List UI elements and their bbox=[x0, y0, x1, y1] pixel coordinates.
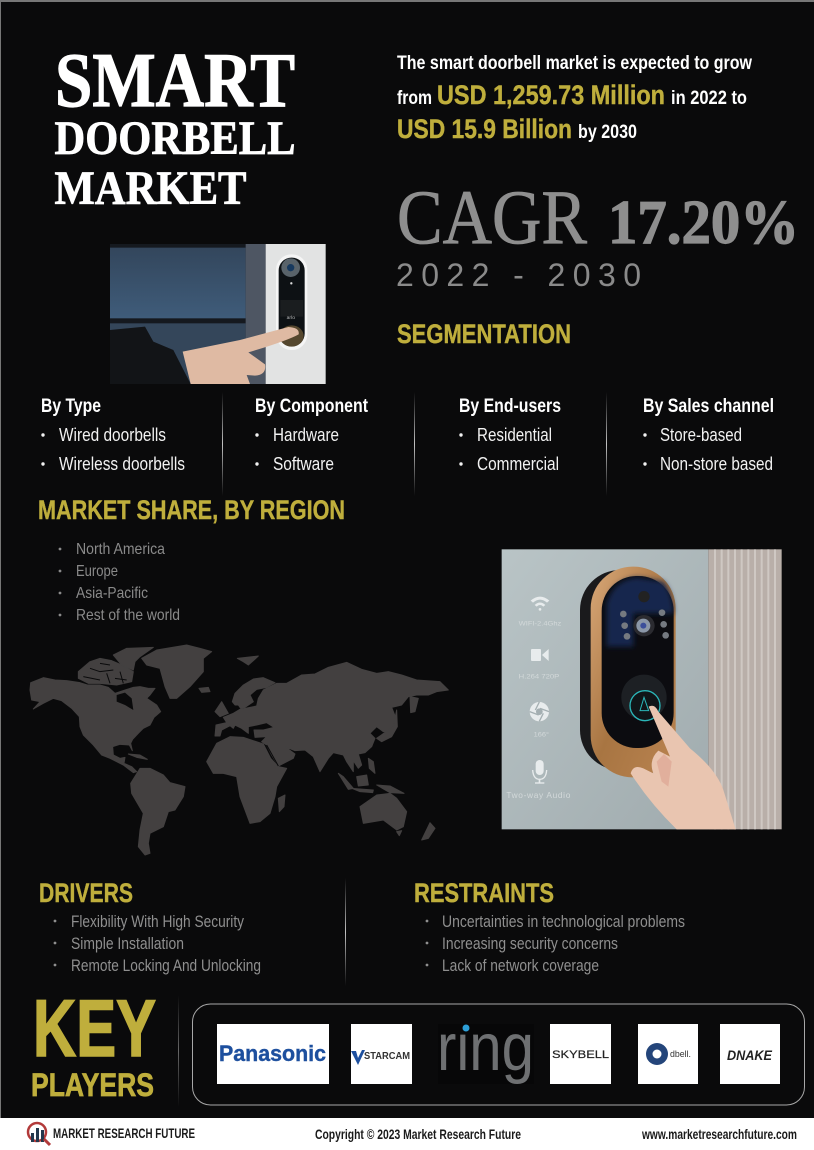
logo: Dnake: DNAKE bbox=[727, 1047, 773, 1063]
market size summary: USD 1,259.73 Million bbox=[437, 80, 665, 110]
CAGR figure: 17.20% bbox=[608, 189, 799, 257]
icon: market research magnifier bbox=[28, 1123, 50, 1145]
logo: Starcam bbox=[351, 1024, 412, 1084]
photo: finger pressing wall doorbell bbox=[110, 244, 326, 384]
logo: Dnake bbox=[720, 1024, 780, 1084]
heading: key players: PLAYERS bbox=[31, 1067, 154, 1103]
region list: Asia-Pacific bbox=[76, 585, 148, 602]
title: DOORBELL bbox=[54, 112, 296, 165]
heading: market share by region: MARKET SHARE, BY REGION bbox=[38, 495, 345, 525]
region list: Rest of the world bbox=[76, 607, 180, 624]
panel: restraints: Uncertainties in technological problems bbox=[442, 913, 685, 931]
photo: gold video doorbell with feature icons bbox=[502, 549, 782, 829]
panel: restraints: RESTRAINTS bbox=[414, 878, 554, 908]
photo: finger pressing wall doorbell: arlo bbox=[287, 315, 295, 321]
photo: gold video doorbell with feature icons: 166° bbox=[534, 732, 550, 738]
footer: Copyright © 2023 Market Research Future bbox=[315, 1126, 521, 1142]
segment: by component bbox=[255, 396, 369, 474]
region list bbox=[59, 541, 180, 624]
panel: drivers: DRIVERS bbox=[39, 878, 133, 908]
segment: by component: By Component bbox=[255, 396, 369, 417]
segment: by type: By Type bbox=[41, 396, 101, 417]
market size summary: USD 15.9 Billion bbox=[397, 114, 572, 144]
market size summary: by 2030 bbox=[578, 122, 637, 143]
panel: company logos bbox=[192, 1004, 804, 1105]
title: MARKET bbox=[54, 162, 246, 215]
segment: by type: Wireless doorbells bbox=[59, 454, 185, 474]
segment: by type bbox=[41, 396, 185, 474]
segment: by end-users: Residential bbox=[477, 425, 552, 445]
panel: drivers: Simple Installation bbox=[71, 935, 184, 953]
forecast period: 2022 - 2030 bbox=[396, 257, 641, 293]
region list: Europe bbox=[76, 563, 118, 580]
panel: drivers: Flexibility With High Security bbox=[71, 913, 245, 931]
footer bbox=[0, 1118, 814, 1150]
heading: key players bbox=[31, 984, 156, 1103]
segment: by sales channel: By Sales channel bbox=[643, 396, 774, 417]
market size summary: in 2022 to bbox=[671, 88, 747, 109]
world map bbox=[30, 645, 448, 855]
logo: SkyBell bbox=[550, 1024, 611, 1084]
logo: Panasonic: Panasonic bbox=[219, 1041, 326, 1066]
photo: gold video doorbell with feature icons: Two-way Audio bbox=[506, 790, 571, 800]
segment: by sales channel bbox=[643, 396, 774, 474]
logo: Ring: ring bbox=[437, 1010, 534, 1085]
market size summary: The smart doorbell market is expected to grow bbox=[397, 53, 752, 74]
region list: North America bbox=[76, 541, 165, 558]
title bbox=[54, 37, 296, 215]
footer: MARKET RESEARCH FUTURE bbox=[53, 1125, 195, 1141]
segment: by component: Software bbox=[273, 454, 334, 474]
panel: drivers bbox=[39, 878, 261, 975]
logo: Starcam: STARCAM bbox=[364, 1051, 410, 1062]
logo: Panasonic bbox=[217, 1024, 329, 1084]
logo: SkyBell: SKYBELL bbox=[552, 1049, 609, 1061]
panel: restraints: Lack of network coverage bbox=[442, 957, 599, 975]
photo: gold video doorbell with feature icons: H.264 720P bbox=[519, 674, 560, 681]
segment: by end-users: By End-users bbox=[459, 396, 561, 417]
segment: by sales channel: Store-based bbox=[660, 425, 742, 445]
logo: dbell bbox=[638, 1024, 698, 1084]
segment: by component: Hardware bbox=[273, 425, 339, 445]
logo: dbell: dbell. bbox=[670, 1049, 691, 1060]
heading: segmentation: SEGMENTATION bbox=[397, 319, 571, 349]
panel: drivers: Remote Locking And Unlocking bbox=[71, 957, 261, 975]
heading: key players: KEY bbox=[33, 984, 156, 1074]
panel: restraints: Increasing security concerns bbox=[442, 935, 618, 953]
segment: by end-users: Commercial bbox=[477, 454, 559, 474]
market size summary: from bbox=[397, 88, 432, 109]
CAGR figure: CAGR bbox=[397, 174, 588, 260]
title: SMART bbox=[55, 37, 295, 123]
market size summary bbox=[397, 53, 752, 144]
segment: by sales channel: Non-store based bbox=[660, 454, 773, 474]
photo: gold video doorbell with feature icons: WIFI-2.4Ghz bbox=[519, 621, 561, 628]
segment: by end-users bbox=[459, 396, 561, 474]
segment: by type: Wired doorbells bbox=[59, 425, 166, 445]
panel: restraints bbox=[414, 878, 685, 975]
CAGR figure bbox=[397, 174, 799, 260]
